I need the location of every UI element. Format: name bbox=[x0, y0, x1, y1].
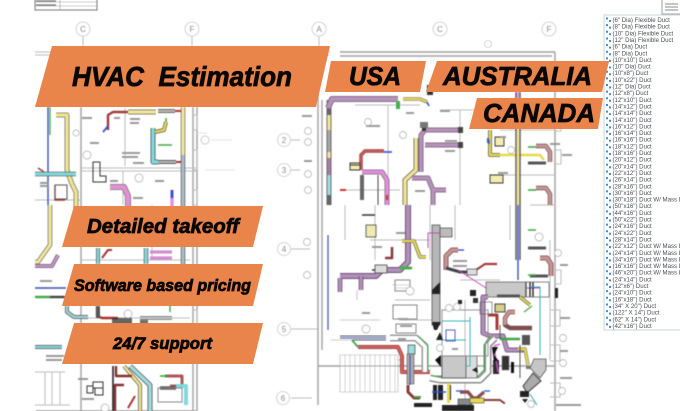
title block table at top left bbox=[35, 0, 97, 10]
column grid bubbles A, C, F: F bbox=[547, 25, 552, 34]
duct schedule text: (12"x6") Duct bbox=[612, 283, 649, 290]
row grid bubbles 2 to 6: 3 bbox=[282, 166, 287, 175]
column grid bubbles A, C, F: C bbox=[437, 25, 443, 34]
duct schedule text: (18"x16") Duct bbox=[612, 150, 652, 157]
column grid bubbles C and F: F bbox=[190, 25, 195, 34]
feature banner: 24/7 support: 24/7 support bbox=[112, 334, 213, 353]
feature banner: 24/7 support bbox=[62, 323, 263, 364]
duct schedule text: (12" Dia) Flexible Duct bbox=[612, 37, 674, 44]
duct schedule text: (16"x14") Duct bbox=[612, 130, 652, 137]
duct schedule text: (10"x22") Duct bbox=[612, 77, 652, 84]
duct schedule text: (20"x12") Duct bbox=[612, 157, 652, 164]
duct schedule text: (34" X 20") Duct bbox=[612, 303, 656, 310]
ductwork, upper right plan bbox=[328, 85, 550, 330]
region banner: CANADA: CANADA bbox=[483, 98, 595, 128]
region banner: AUSTRALIA: AUSTRALIA bbox=[442, 61, 592, 91]
duct schedule text: (12"x8") Duct bbox=[612, 90, 649, 97]
duct schedule text: (26"x14") Duct bbox=[612, 177, 652, 184]
duct schedule text: (62" X 14") Duct bbox=[612, 316, 656, 323]
duct schedule text: (6" Dia) Flexible Duct bbox=[612, 17, 670, 24]
ductwork, lower right plan bbox=[331, 205, 558, 411]
duct schedule text: (24"x14") Duct bbox=[612, 276, 652, 283]
duct schedule text: (122" X 14") Duct bbox=[612, 310, 660, 317]
region banner: USA: USA bbox=[349, 61, 401, 91]
column grid bubbles C and F: C bbox=[80, 25, 86, 34]
duct schedule text: (12"x10") Duct bbox=[612, 97, 652, 104]
duct schedule text: (44"x16") Duct bbox=[612, 210, 652, 217]
duct schedule text: (16"x16") Duct bbox=[612, 137, 652, 144]
duct schedule text bbox=[612, 17, 680, 330]
duct schedule text: (14"x10") Duct bbox=[612, 117, 652, 124]
feature banner: Detailed takeoff: Detailed takeoff bbox=[87, 216, 241, 238]
duct schedule text: (12" Dia) Duct bbox=[612, 84, 651, 90]
duct schedule text: (16"x12") Duct bbox=[612, 123, 652, 130]
duct schedule text: (6" Dia) Duct bbox=[612, 44, 647, 51]
annotations and tags, right plan bbox=[302, 110, 581, 408]
duct schedule text: (24"x10") Duct bbox=[612, 290, 652, 297]
duct schedule icons bbox=[607, 18, 610, 328]
row grid bubbles 2 to 6 bbox=[276, 134, 290, 404]
column grid bubbles A, C, F bbox=[312, 22, 556, 48]
duct schedule text: (28"x16") Duct bbox=[612, 183, 652, 190]
duct schedule text: (42"x16") Duct bbox=[612, 323, 652, 330]
region banner: USA bbox=[325, 61, 426, 92]
duct schedule text: (20"x14") Duct bbox=[612, 163, 652, 170]
title banner: HVAC Estimation: HVAC Estimation bbox=[72, 61, 292, 92]
row grid bubbles 2 to 6: 5 bbox=[282, 325, 287, 334]
column grid bubbles A, C, F: A bbox=[316, 25, 322, 34]
ductwork, left plan bbox=[35, 107, 186, 411]
duct schedule text: (8" Dia) Duct bbox=[612, 50, 647, 57]
left floor plan drawing bbox=[35, 0, 330, 411]
duct schedule text: (14"x14") Duct bbox=[612, 110, 652, 117]
duct schedule text: (18"x12") Duct bbox=[612, 143, 652, 150]
row grid bubbles 2 to 6: 4 bbox=[282, 245, 287, 254]
duct schedule text: (50"x22") Duct bbox=[612, 216, 652, 224]
right floor plan drawing bbox=[276, 22, 581, 411]
duct schedule text: (50"x16") Duct bbox=[612, 203, 652, 210]
duct schedule text: (24"x16") Duct bbox=[612, 223, 652, 230]
duct schedule text: (28"x14") Duct bbox=[612, 236, 652, 244]
duct schedule text: (14"x12") Duct bbox=[612, 104, 652, 110]
duct schedule text: (10" Dia) Duct bbox=[612, 64, 651, 71]
duct schedule text: (30"x16") Duct bbox=[612, 190, 652, 197]
row grid bubbles 2 to 6: 2 bbox=[282, 136, 287, 145]
duct schedule text: (22"x12") Duct bbox=[612, 170, 652, 177]
feature banner: Software based pricing bbox=[62, 264, 263, 306]
sheet note block at top right bbox=[662, 0, 680, 14]
column grid bubbles C and F bbox=[76, 22, 199, 36]
duct schedule text: (24"x22") Duct bbox=[612, 230, 652, 237]
title banner: HVAC Estimation bbox=[35, 46, 330, 107]
duct schedule text: (10" Dia) Flexible Duct bbox=[612, 30, 674, 37]
duct schedule list panel bbox=[604, 15, 680, 330]
row grid bubbles 2 to 6: 6 bbox=[281, 394, 286, 403]
duct schedule text: (8" Dia) Flexible Duct bbox=[612, 24, 670, 31]
duct schedule text: (16"x18") Duct bbox=[612, 296, 652, 303]
annotations and tags, left plan bbox=[40, 117, 235, 411]
duct schedule text: (10"x8") Duct bbox=[612, 70, 649, 77]
duct schedule text: (10"x10") Duct bbox=[612, 57, 652, 64]
feature banner: Detailed takeoff bbox=[62, 206, 263, 247]
feature banner: Software based pricing: Software based pricing bbox=[74, 277, 251, 295]
